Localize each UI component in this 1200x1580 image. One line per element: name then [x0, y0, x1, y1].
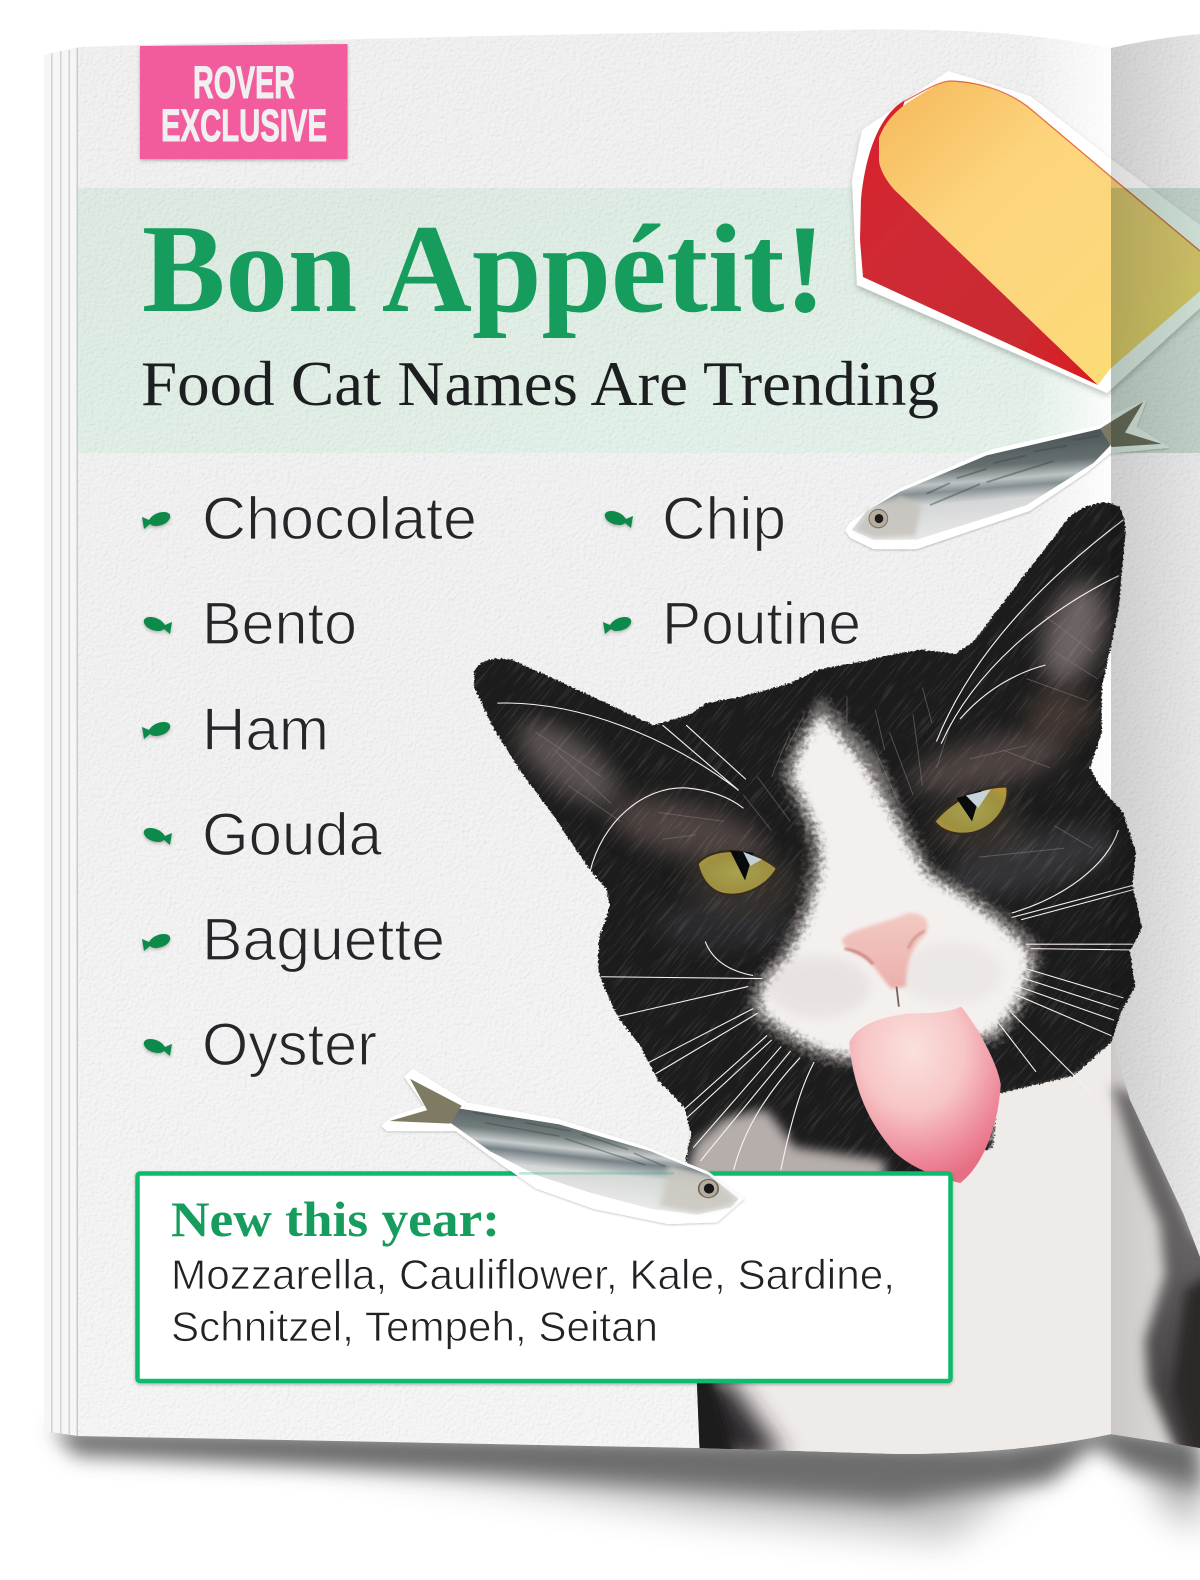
fine fur texture	[474, 503, 1138, 1171]
item: Ham	[142, 696, 329, 763]
title: Bon Appétit!	[142, 200, 826, 339]
box line two: Schnitzel, Tempeh, Seitan	[171, 1303, 658, 1350]
fish head	[855, 496, 922, 538]
book drop shadow	[52, 1425, 1200, 1540]
fish body	[450, 1107, 738, 1215]
cat head	[474, 502, 1142, 1183]
new this year box	[138, 1174, 950, 1381]
right eye	[934, 787, 1008, 834]
fish cut-out	[845, 400, 1170, 549]
whiskers	[498, 520, 1135, 1170]
item: Baguette: Baguette	[202, 906, 445, 973]
item: Oyster: Oyster	[202, 1011, 377, 1078]
right chest fur edge	[986, 1038, 1112, 1150]
cat photo	[474, 502, 1200, 1454]
white blaze grey fringe	[749, 696, 1040, 1067]
ear and brow shading	[468, 41, 1146, 1223]
item: Chip: Chip	[662, 485, 786, 552]
fish tail	[390, 1079, 462, 1124]
white blaze and muzzle	[760, 714, 1029, 1056]
badge line two: EXCLUSIVE	[161, 100, 327, 151]
fish tail	[1100, 402, 1162, 447]
item: Ham: Ham	[202, 696, 329, 763]
cheese wedge sticker	[852, 71, 1200, 393]
left eye	[697, 850, 777, 895]
fur strands	[536, 616, 1097, 857]
fish scale marks	[473, 1113, 665, 1167]
name list column two	[603, 485, 861, 657]
box line one: Mozzarella, Cauliflower, Kale, Sardine,	[171, 1251, 895, 1298]
cat body	[686, 1035, 1200, 1465]
box heading: New this year:	[171, 1191, 500, 1247]
item: Poutine: Poutine	[662, 590, 861, 657]
right page tint	[1111, 0, 1200, 1448]
fish head	[660, 1165, 736, 1213]
item: Chocolate: Chocolate	[202, 485, 477, 552]
top sardine sticker	[845, 400, 1170, 549]
badge: Rover exclusive	[140, 44, 348, 159]
tongue	[849, 1007, 1001, 1183]
fish eye	[699, 1179, 718, 1198]
item: Bento: Bento	[202, 590, 357, 657]
nose	[842, 913, 928, 1007]
fish scale marks	[927, 436, 1100, 505]
fish cut-out	[381, 1069, 744, 1224]
cheese white cut-out	[852, 71, 1200, 393]
lower chest grey fur	[686, 1102, 893, 1172]
item: Chip	[605, 485, 786, 552]
head fur silhouette	[474, 503, 1142, 1196]
fish body	[852, 427, 1110, 540]
stacked page edges	[44, 47, 78, 1436]
cheese face	[879, 81, 1200, 385]
fish eye	[869, 509, 888, 528]
subtitle: Food Cat Names Are Trending	[141, 348, 939, 419]
cheese rind	[860, 100, 1098, 385]
bottom sardine sticker	[381, 1069, 744, 1224]
item: Gouda: Gouda	[202, 801, 383, 868]
name list column one	[142, 485, 477, 1078]
header band	[78, 188, 1111, 453]
badge line one: ROVER	[193, 57, 295, 108]
